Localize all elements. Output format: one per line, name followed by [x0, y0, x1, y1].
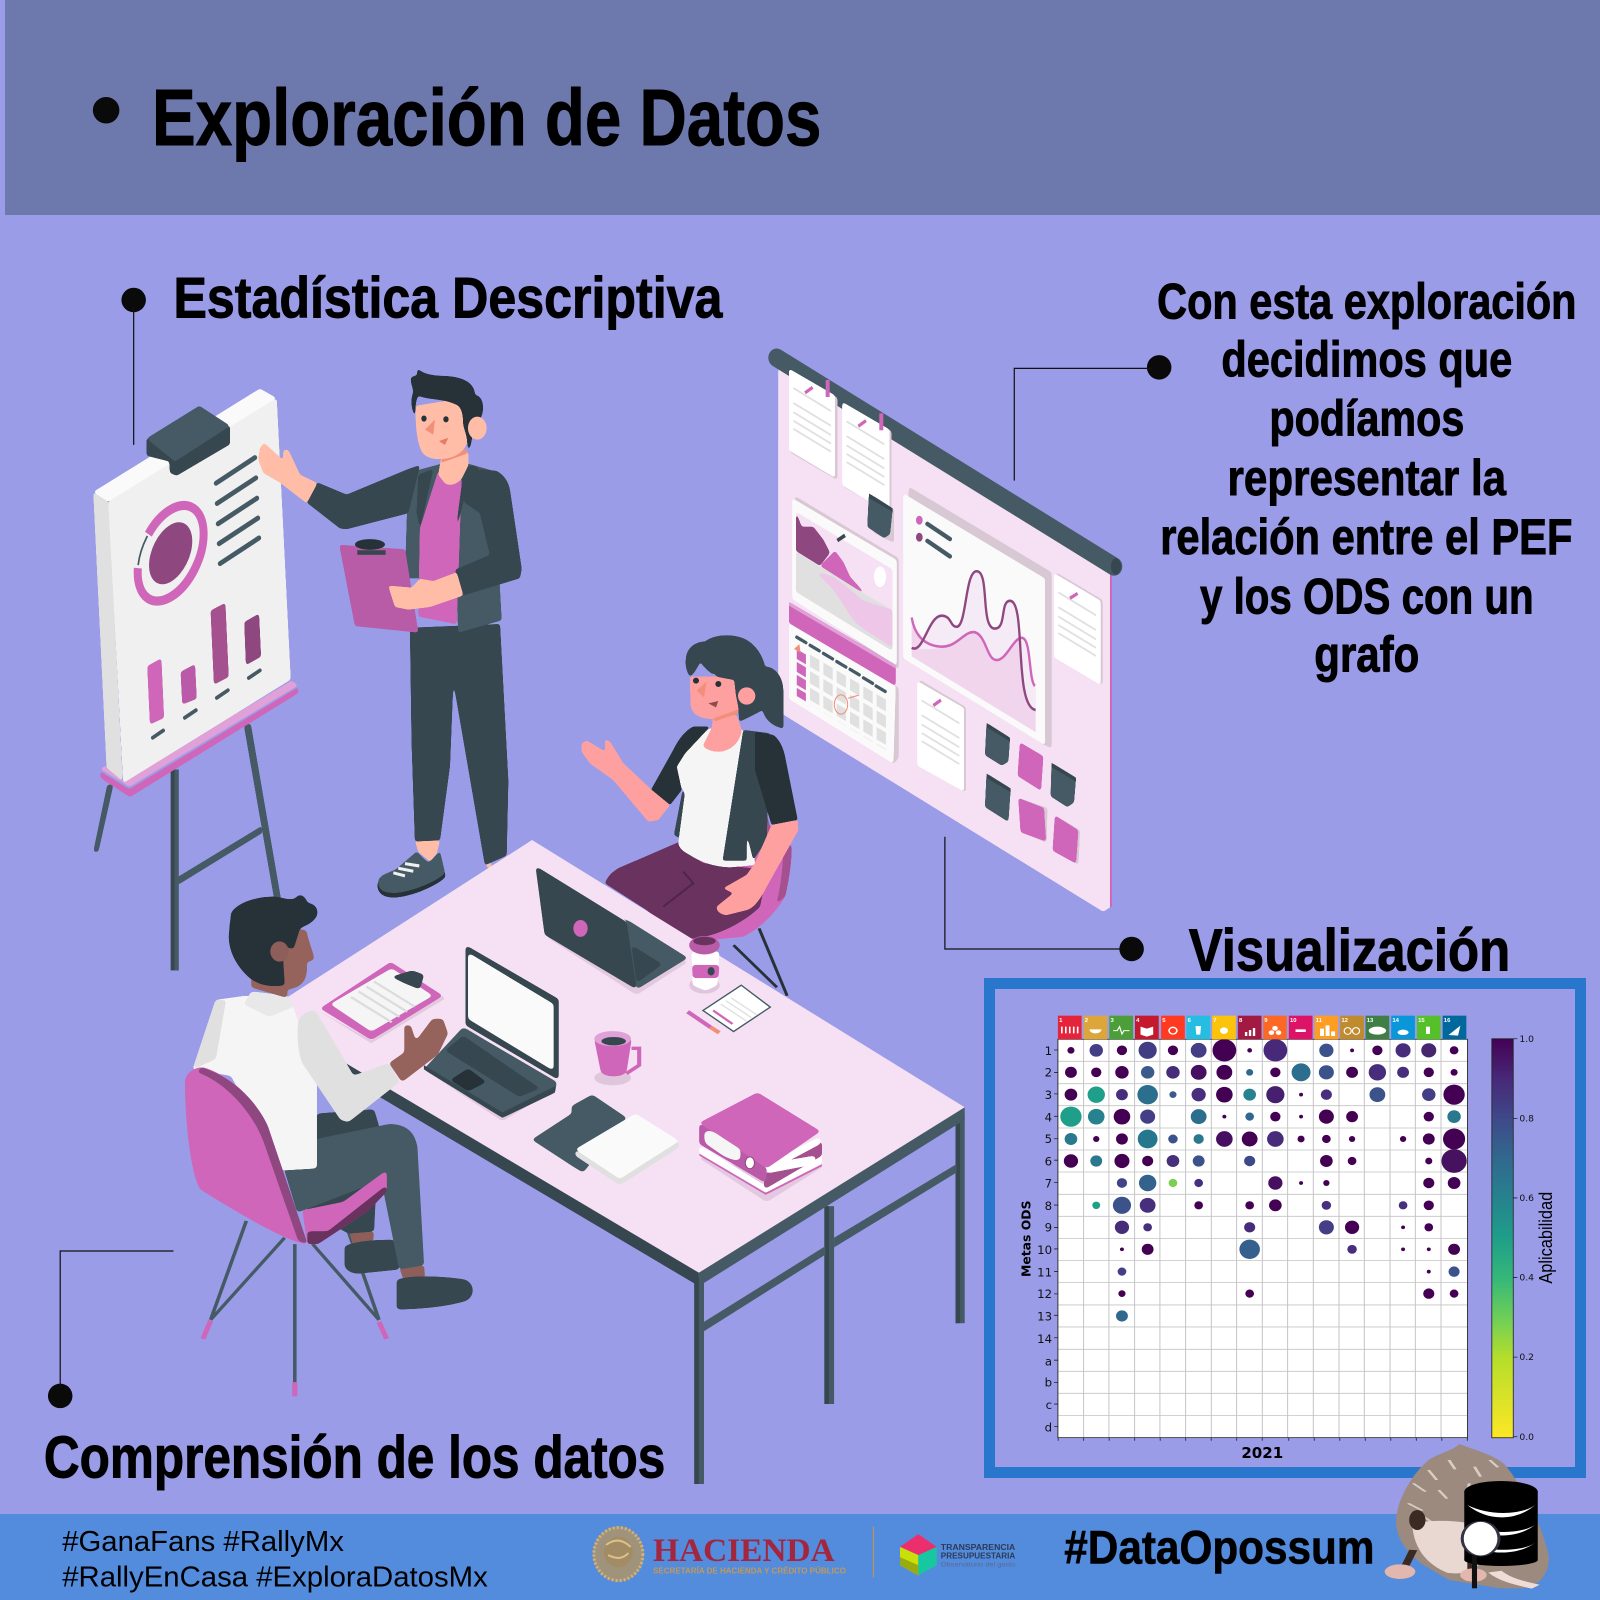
- illustration: desk: [262, 840, 965, 1484]
- illustration: standing man: [258, 368, 522, 897]
- chair legs: [203, 1221, 387, 1396]
- chart axis labels: [1037, 1044, 1467, 1441]
- chart axis labels: c: [1046, 1398, 1052, 1412]
- colorbar: Aplicabilidad: [1535, 1192, 1556, 1284]
- illustration: wall board: [777, 358, 1121, 912]
- text block: conclusion: decidimos que: [1221, 332, 1512, 388]
- colorbar: [1492, 1034, 1556, 1443]
- far chair legs: [734, 928, 787, 996]
- icon: opossum with database: [1385, 1444, 1549, 1588]
- logo: hacienda: SECRETARÍA DE HACIENDA Y CRÉDITO PÚBLICO: [653, 1564, 846, 1575]
- hashtag: data opossum: #DataOpossum: [1064, 1521, 1374, 1573]
- chart axis labels: 10: [1037, 1243, 1052, 1257]
- arm: [298, 1010, 399, 1122]
- colorbar: 0.0: [1519, 1432, 1534, 1443]
- colorbar: 0.8: [1519, 1113, 1534, 1124]
- chart axis labels: 9: [1045, 1221, 1052, 1235]
- SDG icons: 4: [1136, 1018, 1141, 1024]
- heading: estadística descriptiva: Estadística Descriptiva: [173, 266, 724, 330]
- chart axis labels: 12: [1037, 1287, 1052, 1301]
- bottom note: [917, 680, 966, 792]
- SDG icons: 10: [1290, 1018, 1297, 1024]
- SDG icons: 1: [1059, 1018, 1062, 1024]
- head: [251, 928, 314, 998]
- clipboard: [320, 962, 444, 1043]
- SDG icons: 12: [1341, 1018, 1348, 1024]
- text block: conclusion: podíamos: [1269, 391, 1464, 447]
- SDG icons: 15: [1418, 1018, 1425, 1024]
- logo: hacienda: HACIENDA: [653, 1533, 835, 1569]
- chart axis labels: a: [1045, 1354, 1052, 1368]
- text block: conclusion: grafo: [1314, 626, 1419, 682]
- open laptop: [424, 945, 559, 1121]
- logo: transparencia presupuestaria: [900, 1534, 1016, 1575]
- desk legs: [694, 1114, 965, 1484]
- chart axis labels: 1: [1045, 1044, 1052, 1058]
- panel: bubble chart frame: [990, 984, 1580, 1472]
- SDG icons: 11: [1316, 1018, 1322, 1024]
- callout line: comprensión: [48, 1251, 173, 1408]
- callout line: visualización: [945, 837, 1144, 961]
- shirt: [193, 996, 317, 1170]
- SDG icons: [1058, 1016, 1466, 1039]
- SDG icons: 5: [1162, 1018, 1166, 1024]
- board rod: [777, 358, 1114, 566]
- callout line: conclusion: [1014, 355, 1171, 481]
- colorbar: 0.2: [1519, 1352, 1534, 1363]
- title: Exploración de Datos: [152, 73, 821, 162]
- SDG icons: 2: [1085, 1018, 1088, 1024]
- calendar: [789, 602, 899, 764]
- chart axis labels: 11: [1037, 1266, 1052, 1280]
- chart: bubble grid: [1058, 1016, 1468, 1438]
- notebook and pen: [688, 985, 770, 1033]
- pinned notes: [789, 369, 894, 543]
- SDG icons: 9: [1264, 1018, 1268, 1024]
- large line chart: [903, 487, 1052, 748]
- SDG icons: 6: [1188, 1018, 1191, 1024]
- SDG icons: 13: [1367, 1018, 1373, 1024]
- SDG icons: 7: [1213, 1018, 1217, 1024]
- coffee mug: [594, 1031, 639, 1085]
- board panel: [778, 368, 1112, 912]
- footer hashtags: #GanaFans #RallyMx: [62, 1526, 344, 1558]
- landscape picture: [792, 496, 899, 669]
- logo: transparencia presupuestaria: Observatorio del gasto: [941, 1561, 1016, 1568]
- chart axis labels: 7: [1045, 1177, 1052, 1191]
- colorbar: 1.0: [1519, 1034, 1534, 1045]
- sticky notes: [985, 723, 1080, 865]
- chart axis labels: 3: [1045, 1088, 1052, 1102]
- SDG icons: 14: [1392, 1018, 1400, 1024]
- colorbar: 0.6: [1519, 1193, 1534, 1204]
- desk top: [262, 840, 965, 1273]
- footer hashtags: #RallyEnCasa #ExploraDatosMx: [62, 1562, 488, 1594]
- text block: conclusion: [1157, 273, 1577, 682]
- chart axis labels: 4: [1045, 1110, 1052, 1124]
- chart axis labels: 5: [1045, 1132, 1052, 1146]
- illustration: seated woman with chair: [582, 635, 798, 942]
- chart axis labels: b: [1045, 1376, 1052, 1390]
- heading: visualización: Visualización: [1189, 916, 1510, 983]
- bubbles: [1060, 1039, 1467, 1322]
- x axis title: 2021: [1241, 1445, 1283, 1462]
- logo: hacienda: [593, 1527, 873, 1582]
- footer hashtags: [62, 1526, 488, 1594]
- heading: comprensión de los datos: Comprensión de los datos: [44, 1424, 665, 1491]
- SDG icons: 16: [1444, 1018, 1450, 1024]
- SDG icons: 8: [1239, 1018, 1242, 1024]
- chart axis labels: 14: [1037, 1332, 1052, 1346]
- colorbar: 0.4: [1519, 1273, 1534, 1284]
- desk edges: [262, 1013, 699, 1286]
- right note: [1054, 572, 1103, 685]
- logo: transparencia presupuestaria: PRESUPUESTARIA: [941, 1552, 1015, 1561]
- binders: [695, 1093, 827, 1202]
- y axis title: Metas ODS: [1020, 1201, 1035, 1277]
- text block: conclusion: representar la: [1228, 450, 1507, 506]
- folder and papers: [532, 1095, 679, 1185]
- rod end: [1111, 558, 1121, 575]
- logo: transparencia presupuestaria: TRANSPARENCIA: [941, 1543, 1015, 1552]
- illustration: easel with chart: [93, 389, 298, 970]
- closed laptop: [536, 866, 688, 995]
- board right edge: [1110, 571, 1112, 908]
- illustration: seated man with chair: [185, 895, 473, 1396]
- SDG icons: 3: [1110, 1018, 1114, 1024]
- chart axis labels: 8: [1045, 1199, 1052, 1213]
- chart axis labels: 13: [1037, 1309, 1052, 1323]
- header band: [5, 0, 1600, 215]
- chart axis labels: d: [1045, 1421, 1052, 1435]
- coffee cup: [689, 936, 720, 994]
- legs and shoes: [349, 1231, 374, 1246]
- heading: estadística descriptiva: [121, 266, 724, 445]
- chart axis labels: 6: [1045, 1154, 1052, 1168]
- chair shell: [302, 1170, 387, 1244]
- footer band: [0, 1514, 1600, 1600]
- chart axis labels: 2: [1045, 1066, 1052, 1080]
